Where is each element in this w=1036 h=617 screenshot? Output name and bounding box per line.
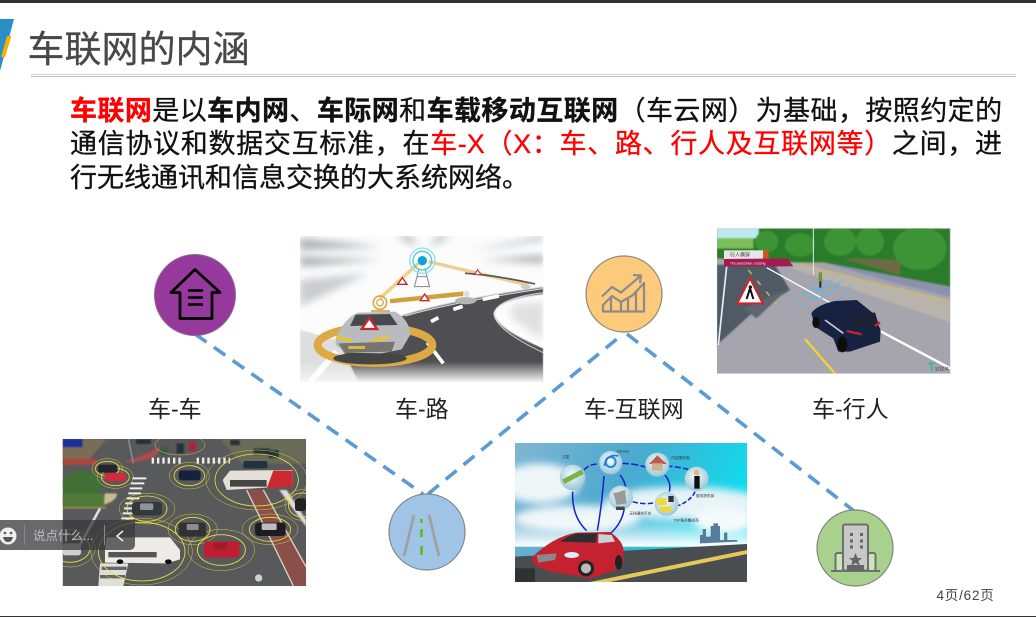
text block: definition: 车联网是以车内网、车际网和车载移动互联网（车云网）为基础，按照约定的 [70,96,1002,126]
icon: blue road circle [389,494,465,570]
title: 车联网的内涵 [28,29,250,70]
photo: internet services [515,443,747,582]
photo: pedestrian crossing: 行人横穿 [730,251,750,258]
widget: chat bar: 说点什么... [33,528,93,543]
text block: definition: 通信协议和数据交互标准，在车-X（X：车、路、行人及互联网等）之间，进 [70,129,1002,159]
photo: internet services: 无线通信平台 [629,511,652,516]
title rule [31,74,1016,77]
photo: smart intersection [62,439,306,586]
photo: road network [300,236,543,382]
icon: title accent [0,19,14,71]
label: 车-车: 车-车 [148,396,202,422]
connector: dashed zigzag [195,334,854,511]
icon: purple house circle [154,254,236,336]
photo: internet services: 卫星 [562,454,570,459]
label: 车-行人: 车-行人 [812,396,889,422]
photo: internet services: 内容提供商 [671,455,690,460]
bottom bar [0,616,1036,617]
page number: 4页/62页 [936,588,995,603]
photo: internet services: Internet [617,449,629,453]
photo: internet services: 服务提供商 [696,493,715,498]
label: 车-路: 车-路 [395,396,449,422]
icon: orange chart circle [586,256,662,332]
photo: pedestrian crossing [717,227,950,374]
text block: definition [70,96,1002,193]
label: 车-互联网: 车-互联网 [584,396,684,422]
widget: chat bar [0,520,135,550]
top bar [0,0,1036,3]
icon: green building circle [817,510,893,586]
photo: pedestrian crossing: 钛媒体 [935,366,949,373]
photo: internet services: TSP服务集成商 [673,517,699,522]
text block: definition: 行无线通讯和信息交换的大系统网络。 [70,163,529,193]
photo: pedestrian crossing: The pedestrian crossing [730,262,766,266]
